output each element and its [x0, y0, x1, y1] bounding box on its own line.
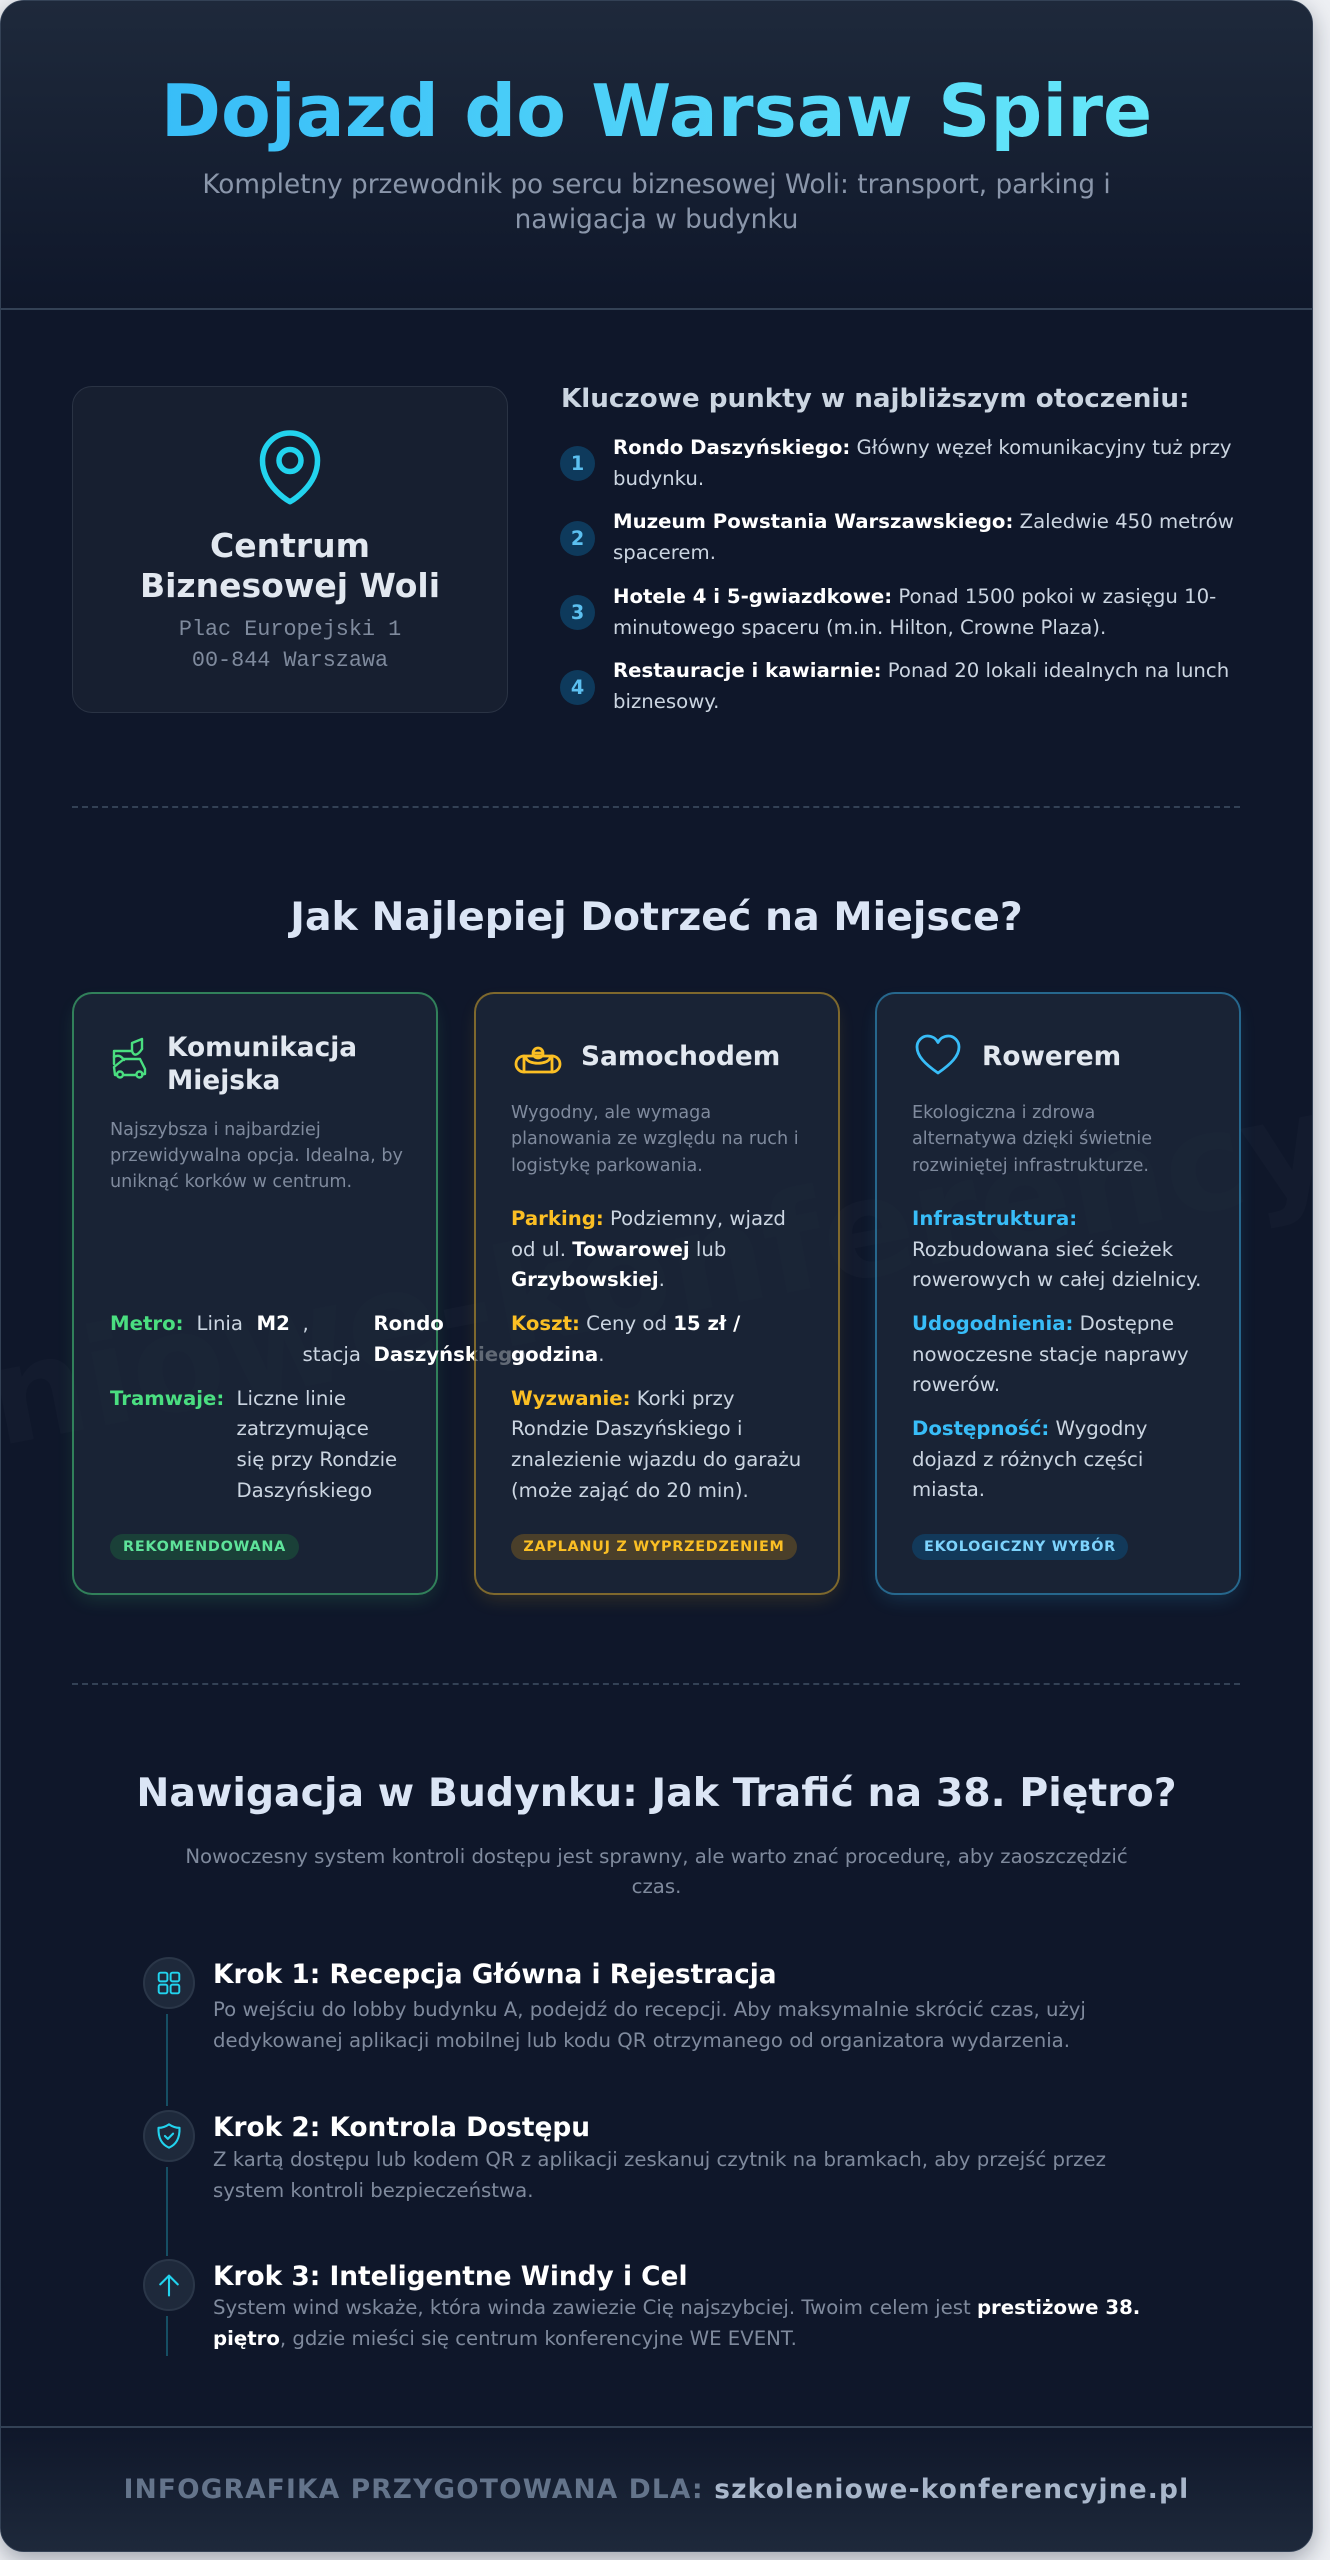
header panel: [1, 1, 1312, 310]
infrastructure info: Rozbudowana sieć ścieżek: [912, 1238, 1173, 1261]
availability info: dojazd z różnych części: [912, 1448, 1143, 1471]
section heading: navigation: Nawigacja w Budynku: Jak Trafić na 38. Piętro?: [136, 1770, 1177, 1816]
icon: grid: [158, 1972, 180, 1994]
subtitle: nawigacja w budynku: [515, 205, 798, 235]
tram info: zatrzymujące: [236, 1417, 369, 1440]
point 4 text: Restauracje i kawiarnie: Ponad 20 lokali idealnych na lunch: [613, 659, 1229, 682]
tram info: Liczne linie: [236, 1386, 346, 1410]
title: Dojazd do Warsaw Spire: [161, 70, 1152, 154]
tram info: się przy Rondzie: [236, 1448, 397, 1471]
point 3 text: [613, 585, 1216, 639]
card description: [912, 1103, 1152, 1176]
card description: alternatywa dzięki świetnie: [912, 1129, 1152, 1149]
point 2 badge: 2: [571, 527, 584, 550]
step 2 text: [213, 2148, 1106, 2202]
step 1 title: Krok 1: Recepcja Główna i Rejestracja: [213, 1959, 777, 1990]
panel: car: [474, 992, 840, 1595]
availability info: miasta.: [912, 1478, 985, 1501]
tram info: [110, 1386, 397, 1502]
metro info: M2: [256, 1312, 290, 1335]
point 1 badge: [560, 446, 595, 481]
badge: eco choice: [912, 1534, 1128, 1560]
metro info: stacja: [302, 1343, 361, 1366]
card description: Najszybsza i najbardziej: [110, 1120, 321, 1140]
badge: plan ahead: [511, 1534, 797, 1560]
challenge info: Wyzwanie: Korki przy: [511, 1386, 735, 1410]
amenities info: nowoczesne stacje naprawy: [912, 1343, 1189, 1366]
parking info: Grzybowskiej.: [511, 1268, 665, 1291]
amenities info: [912, 1312, 1189, 1396]
badge: eco choice: EKOLOGICZNY WYBÓR: [924, 1539, 1116, 1555]
location name: Centrum: [210, 526, 370, 565]
availability info: Dostępność: Wygodny: [912, 1417, 1147, 1440]
amenities info: rowerów.: [912, 1373, 1000, 1396]
section intro: Nowoczesny system kontroli dostępu jest sprawny, ale warto znać procedurę, aby zaoszczędzić: [185, 1845, 1128, 1868]
key points list: [560, 436, 1234, 713]
footer text: INFOGRAFIKA PRZYGOTOWANA DLA: szkoleniowe-konferencyjne.pl: [124, 2474, 1189, 2505]
badge: plan ahead: ZAPLANUJ Z WYPRZEDZENIEM: [523, 1539, 785, 1555]
card description: Ekologiczna i zdrowa: [912, 1103, 1095, 1123]
address: [179, 617, 401, 672]
panel: public transport: [72, 992, 438, 1595]
point 1 text: [613, 436, 1232, 490]
step 2 title: Krok 2: Kontrola Dostępu: [213, 2112, 590, 2143]
point 3 text: minutowego spaceru (m.in. Hilton, Crowne Plaza).: [613, 616, 1106, 639]
icon: shield check: [157, 2123, 181, 2149]
step 1 text: [213, 1998, 1086, 2052]
step 3 marker: [143, 2259, 195, 2311]
step 2 marker: [143, 2110, 195, 2162]
card title: Samochodem: [581, 1040, 780, 1072]
point 4 text: [613, 659, 1229, 713]
point 2 text: [613, 510, 1234, 564]
metro info: Daszyńskiego: [374, 1343, 526, 1366]
icon: arrow up: [159, 2274, 179, 2296]
infrastructure info: [912, 1207, 1201, 1291]
point 3 badge: [560, 595, 595, 630]
cost info: godzina.: [511, 1343, 604, 1366]
parking info: od ul. Towarowej lub: [511, 1238, 726, 1261]
infrastructure info: rowerowych w całej dzielnicy.: [912, 1268, 1201, 1291]
card title: Komunikacja: [167, 1032, 357, 1062]
tram info: Tramwaje:: [110, 1386, 224, 1410]
point 4 badge: 4: [571, 676, 584, 699]
step 2 text: system kontroli bezpieczeństwa.: [213, 2179, 533, 2202]
cost info: [511, 1312, 740, 1366]
cost info: Koszt: Ceny od 15 zł /: [511, 1312, 740, 1335]
tram info: Daszyńskiego: [236, 1479, 372, 1502]
metro info: Rondo: [374, 1312, 444, 1335]
step 3 text: [213, 2296, 1140, 2350]
icon: map pin: [260, 430, 320, 504]
amenities info: Udogodnienia: Dostępne: [912, 1312, 1174, 1335]
point 4 badge: [560, 670, 595, 705]
step 1 text: Po wejściu do lobby budynku A, podejdź do recepcji. Aby maksymalnie skrócić czas, użyj: [213, 1998, 1086, 2021]
step 3 text: piętro, gdzie mieści się centrum konferencyjne WE EVENT.: [213, 2327, 797, 2350]
card title: [167, 1032, 357, 1096]
step 1 marker: [143, 1957, 195, 2009]
card title: Miejska: [167, 1065, 280, 1096]
section heading: transport: Jak Najlepiej Dotrzeć na Miejsce?: [290, 894, 1023, 940]
challenge info: Rondzie Daszyńskiego i: [511, 1417, 742, 1440]
metro info: ,: [302, 1312, 309, 1335]
parking info: [511, 1207, 786, 1291]
point 2 text: spacerem.: [613, 541, 716, 564]
location name: [140, 526, 440, 605]
subtitle: [202, 170, 1111, 235]
step 3 text: System wind wskaże, która winda zawiezie Cię najszybciej. Twoim celem jest prestiżowe 38.: [213, 2296, 1140, 2319]
section intro: [185, 1845, 1128, 1898]
metro info: Metro:: [110, 1312, 183, 1335]
point 1 text: budynku.: [613, 467, 704, 490]
point 4 text: biznesowy.: [613, 690, 719, 713]
address: Plac Europejski 1: [179, 617, 401, 642]
card description: przewidywalna opcja. Idealna, by: [110, 1146, 403, 1166]
step 1 text: dedykowanej aplikacji mobilnej lub kodu QR otrzymanego od organizatora wydarzenia.: [213, 2029, 1070, 2052]
card description: uniknąć korków w centrum.: [110, 1172, 352, 1192]
point 3 text: Hotele 4 i 5-gwiazdkowe: Ponad 1500 pokoi w zasięgu 10-: [613, 585, 1216, 608]
badge: recommended: [110, 1534, 299, 1560]
section intro: czas.: [632, 1875, 681, 1898]
point 2 text: Muzeum Powstania Warszawskiego: Zaledwie 450 metrów: [613, 510, 1234, 533]
card description: planowania ze względu na ruch i: [511, 1129, 799, 1149]
metro info: Linia: [196, 1312, 243, 1335]
step 3 title: Krok 3: Inteligentne Windy i Cel: [213, 2261, 688, 2292]
key points heading: Kluczowe punkty w najbliższym otoczeniu:: [561, 384, 1190, 414]
panel: location card: [72, 386, 508, 713]
icon: tram and bus: [112, 1038, 146, 1079]
challenge info: (może zająć do 20 min).: [511, 1479, 749, 1502]
card description: [110, 1120, 403, 1192]
card description: [511, 1103, 799, 1176]
icon: car: [514, 1046, 562, 1074]
point 2 badge: [560, 521, 595, 556]
infrastructure info: Infrastruktura:: [912, 1207, 1077, 1230]
footer panel: [1, 2426, 1312, 2552]
challenge info: [511, 1386, 801, 1502]
card description: rozwiniętej infrastrukturze.: [912, 1156, 1149, 1176]
card description: Wygodny, ale wymaga: [511, 1103, 711, 1123]
location name: Biznesowej Woli: [140, 566, 440, 605]
panel: bicycle: [875, 992, 1241, 1595]
subtitle: Kompletny przewodnik po sercu biznesowej Woli: transport, parking i: [202, 170, 1111, 200]
step 2 text: Z kartą dostępu lub kodem QR z aplikacji zeskanuj czytnik na bramkach, aby przejść przez: [213, 2148, 1106, 2171]
badge: recommended: REKOMENDOWANA: [123, 1539, 286, 1555]
point 1 text: Rondo Daszyńskiego: Główny węzeł komunikacyjny tuż przy: [613, 436, 1232, 459]
point 3 badge: 3: [571, 601, 584, 624]
parking info: Parking: Podziemny, wjazd: [511, 1207, 786, 1230]
challenge info: znalezienie wjazdu do garażu: [511, 1448, 801, 1471]
point 1 badge: 1: [571, 452, 584, 475]
icon: heart: [916, 1034, 960, 1074]
card description: logistykę parkowania.: [511, 1156, 703, 1176]
card title: Rowerem: [982, 1040, 1121, 1072]
availability info: [912, 1417, 1147, 1501]
address: 00-844 Warszawa: [192, 648, 388, 672]
metro info: [110, 1312, 526, 1366]
